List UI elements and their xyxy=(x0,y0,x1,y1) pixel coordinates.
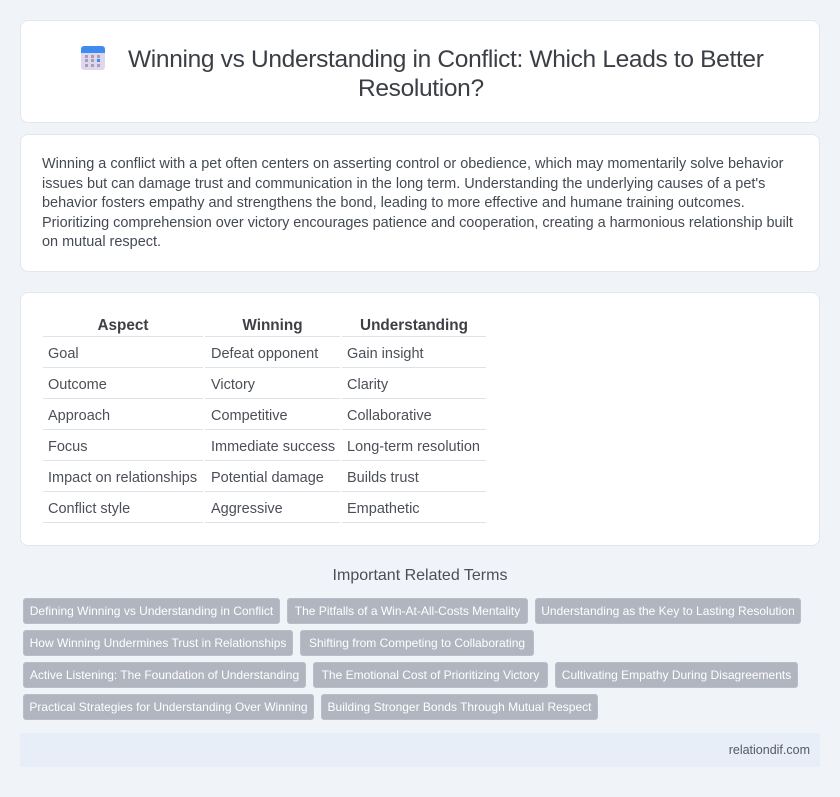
related terms tags: Defining Winning vs Understanding in Conflict xyxy=(30,604,273,618)
icon: calendar xyxy=(81,46,105,70)
intro text xyxy=(42,156,793,250)
table rows: Builds trust xyxy=(347,470,419,486)
table rows: Empathetic xyxy=(347,501,420,517)
title: Winning vs Understanding in Conflict: Which Leads to Better xyxy=(128,46,764,73)
title: Resolution? xyxy=(358,75,484,102)
related terms heading: Important Related Terms xyxy=(333,567,507,584)
footer bar xyxy=(20,733,820,767)
related terms tags: The Pitfalls of a Win-At-All-Costs Mentality xyxy=(295,604,520,618)
intro text: Winning a conflict with a pet often centers on asserting control or obedience, which may momentarily solve behavior xyxy=(42,156,784,172)
table rows: Goal xyxy=(48,346,79,362)
table rows: Victory xyxy=(211,377,255,393)
related terms tags: Active Listening: The Foundation of Understanding xyxy=(30,668,299,682)
related terms tags: Building Stronger Bonds Through Mutual Respect xyxy=(328,700,591,714)
header card xyxy=(20,20,820,123)
table rows: Collaborative xyxy=(347,408,432,424)
table rows: Approach xyxy=(48,408,110,424)
table rows: Impact on relationships xyxy=(48,470,197,486)
table rows: Long-term resolution xyxy=(347,439,480,455)
related terms tags: Shifting from Competing to Collaborating xyxy=(309,636,525,650)
intro text: Prioritizing comprehension over victory encourages patience and cooperation, creating a harmonious relationship built xyxy=(42,214,793,230)
table rows: Conflict style xyxy=(48,501,130,517)
intro text: on mutual respect. xyxy=(42,234,161,250)
related terms tags: Understanding as the Key to Lasting Resolution xyxy=(541,604,795,618)
table header: Understanding xyxy=(360,317,468,334)
table rows: Competitive xyxy=(211,408,288,424)
table rows: Outcome xyxy=(48,377,107,393)
table rows: Gain insight xyxy=(347,346,424,362)
table header xyxy=(97,317,468,334)
table rows: Aggressive xyxy=(211,501,283,517)
table rows: Focus xyxy=(48,439,88,455)
related terms tags: The Emotional Cost of Prioritizing Victory xyxy=(322,668,539,682)
title xyxy=(128,46,764,102)
table header: Aspect xyxy=(97,317,148,334)
intro paragraph card xyxy=(20,134,820,272)
related terms tags xyxy=(23,598,801,720)
intro text: behavior fosters empathy and strengthens the bond, leading to more effective and humane training outcomes. xyxy=(42,195,745,211)
related terms tags: Practical Strategies for Understanding Over Winning xyxy=(29,700,308,714)
table rows: Defeat opponent xyxy=(211,346,318,362)
table header: Winning xyxy=(242,317,303,334)
intro text: issues but can damage trust and communication in the long term. Understanding the underlying causes of a pet's xyxy=(42,176,765,192)
related terms tags: How Winning Undermines Trust in Relationships xyxy=(30,636,286,650)
table rows: Immediate success xyxy=(211,439,335,455)
table rows xyxy=(43,336,486,523)
footer source: relationdif.com xyxy=(729,743,810,757)
table rows: Potential damage xyxy=(211,470,324,486)
table rows: Clarity xyxy=(347,377,388,393)
comparison table card xyxy=(20,292,820,546)
related terms tags: Cultivating Empathy During Disagreements xyxy=(562,668,791,682)
